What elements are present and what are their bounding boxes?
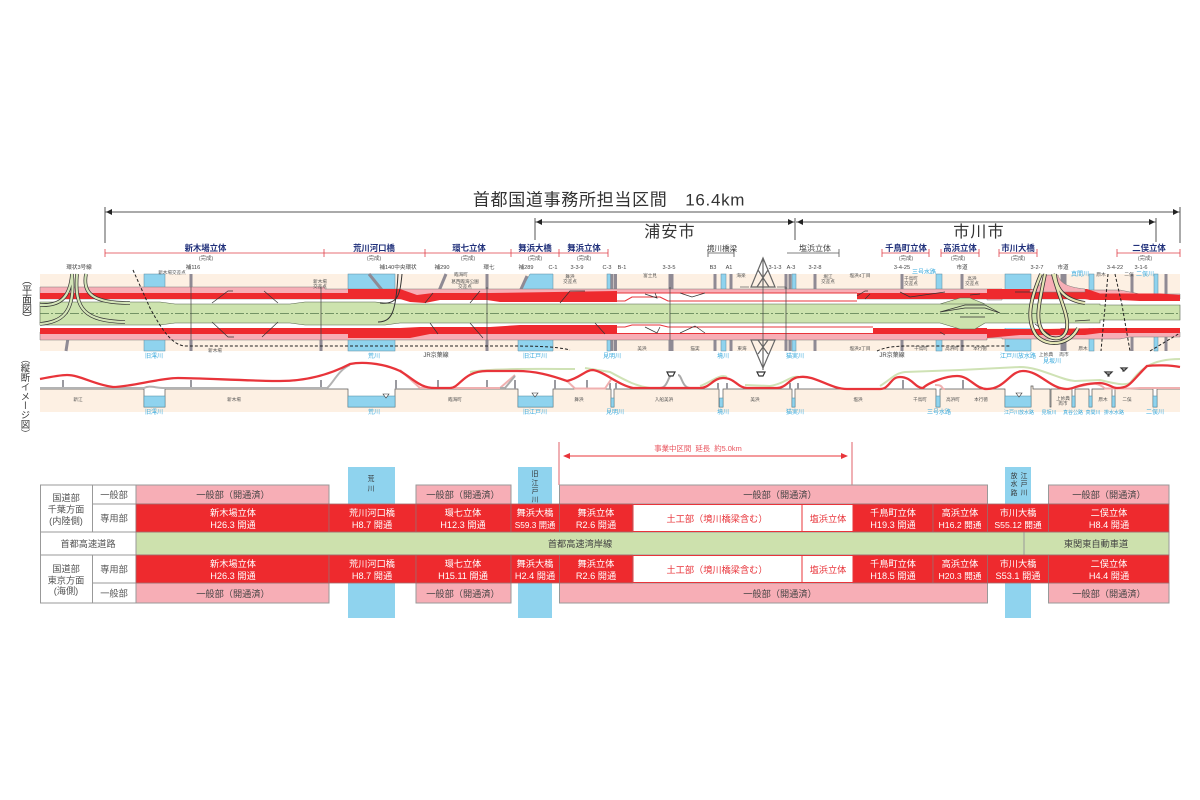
lower dedicated row labels: 市川大橋	[1000, 558, 1036, 569]
water level marks	[383, 393, 1022, 398]
lower dedicated row labels: 舞浜立体	[578, 558, 614, 569]
plan small place labels: 葛西臨海公園	[451, 278, 479, 285]
road names: 環七	[483, 263, 495, 271]
upper dedicated row labels: S59.3 開通	[515, 520, 556, 530]
road names: B-1	[618, 265, 626, 271]
completion notes: (完成)	[199, 254, 213, 262]
plan river and line labels: JR京葉線	[423, 351, 449, 359]
river columns	[348, 467, 1031, 618]
plan small place labels: 新木場	[208, 347, 222, 354]
plan small place labels: 交差点	[458, 283, 472, 290]
JR Keiyo line dashed	[133, 270, 1180, 351]
upper dedicated row labels: 環七立体	[445, 507, 481, 518]
green row labels: 東関東自動車道	[1064, 538, 1128, 549]
road names: 補140中央環状	[379, 263, 417, 271]
plan small place labels: 高浜	[967, 275, 977, 282]
upper dedicated row labels: H8.4 開通	[1089, 520, 1129, 530]
lower dedicated row labels: H8.7 開通	[352, 571, 392, 581]
section names: 環七立体	[452, 243, 486, 253]
road names: 三号水路	[912, 268, 936, 276]
green expressway line	[470, 359, 1180, 388]
plan river and line labels: 猫実川	[786, 352, 804, 360]
plan background	[40, 274, 1180, 351]
lower dedicated row labels: 千鳥町立体	[870, 558, 916, 569]
interchange at Arakawa	[378, 274, 402, 322]
lower dedicated row labels: 荒川河口橋	[349, 558, 395, 569]
road names: C-1	[548, 265, 558, 271]
status table	[40, 467, 1169, 618]
completion notes: (完成)	[899, 254, 913, 262]
road names: 3-3-5	[662, 265, 676, 271]
profile river labels: 旧澪川	[145, 408, 163, 416]
river labels	[368, 470, 1028, 504]
lower dedicated row labels: 土工部（境川橋梁含む）	[666, 564, 768, 575]
pink row labels: 一般部（開通済）	[426, 588, 500, 599]
red lines of unfinished section	[617, 293, 873, 334]
plan river and line labels: 両市	[1059, 351, 1069, 358]
profile place labels: 原木	[1098, 396, 1108, 403]
green expressway row	[136, 532, 1169, 555]
ground	[40, 386, 1180, 412]
profile place labels: 美浜	[750, 396, 760, 403]
black span lines	[708, 249, 839, 257]
profile place labels: 新木場	[227, 396, 241, 403]
row heading text: 国道部	[52, 492, 80, 503]
profile river labels: 真谷公路	[1063, 409, 1083, 416]
plan small place labels: 新木場交差点	[158, 269, 186, 276]
completion notes: (完成)	[367, 254, 381, 262]
profile place labels: 高浜町	[946, 396, 960, 403]
row heading text: 東京方面	[48, 574, 84, 586]
profile river labels: 旧江戸川	[523, 409, 547, 416]
plan small place labels: 千鳥町	[904, 275, 918, 282]
plan small place labels: 交差点	[313, 283, 327, 290]
upper dedicated row labels: 塩浜立体	[810, 513, 846, 524]
general road grey and pink profile	[40, 365, 1180, 389]
section names	[185, 243, 1166, 253]
span arrow: project section 5.0km	[559, 442, 852, 485]
lower dedicated row	[136, 555, 1169, 583]
thin bridge lines through the lanes	[191, 287, 786, 340]
profile river labels: 見明川	[606, 409, 624, 416]
plan small place labels: 猫実	[690, 345, 700, 352]
section span lines	[105, 249, 1180, 257]
road names: 3-1-6	[1134, 265, 1148, 271]
completion notes: (完成)	[1011, 254, 1025, 262]
label: section length: 事業中区間 延長 約5.0km	[654, 444, 742, 453]
pink row labels	[196, 489, 1146, 599]
lower dedicated row labels: H2.4 開通	[515, 571, 555, 581]
river water in profile	[144, 396, 1157, 407]
rivers in plan	[144, 274, 1158, 351]
profile place labels: 千鳥町	[913, 396, 927, 403]
diamond interchange lower	[751, 340, 775, 370]
upper dedicated row labels: 土工部（境川橋梁含む）	[666, 513, 768, 524]
plan small place labels: 富士見	[643, 272, 657, 279]
lower dedicated row labels: H18.5 開通	[870, 571, 916, 581]
lower dedicated row labels: S53.1 開通	[996, 571, 1040, 581]
road names: 3-2-7	[1030, 265, 1044, 271]
plan small place labels: 東海	[737, 345, 747, 352]
upper dedicated row labels: H16.2 開通	[939, 520, 982, 530]
completion notes: (完成)	[1138, 254, 1152, 262]
piers	[63, 380, 963, 389]
white unfinished section lower	[617, 326, 873, 333]
plan small place labels: 交差点	[904, 280, 918, 287]
profile river labels	[145, 408, 1164, 416]
row heading text: 国道部	[52, 563, 80, 574]
road names: 環状3号線	[66, 263, 92, 271]
lower general lanes pink band	[40, 332, 1180, 340]
profile river labels: 江戸川放水路	[1004, 409, 1034, 416]
lower dedicated row labels: 舞浜大橋	[517, 558, 553, 569]
header: jurisdiction span and city spans	[105, 190, 1180, 243]
pink row labels: 一般部（開通済）	[196, 489, 270, 500]
row heading text: (内陸側)	[49, 515, 83, 526]
upper exclusive lanes red	[40, 289, 1180, 303]
ramp details	[212, 291, 1090, 338]
profile place labels: 塩浜	[853, 396, 863, 403]
upper dedicated row labels: H26.3 開通	[210, 520, 256, 530]
upper dedicated row	[136, 504, 1169, 532]
upper white unopened cells	[633, 504, 853, 532]
Ichikawa loop interchange	[1030, 274, 1085, 343]
lower white unopened cells	[633, 556, 853, 582]
river labels: 旧	[532, 470, 539, 478]
road names: 補289	[519, 263, 533, 271]
plan small place labels: 新木場	[313, 278, 327, 285]
pink row labels: 一般部（開通済）	[1072, 588, 1146, 599]
river labels: 放	[1011, 471, 1018, 480]
plan river and line labels: 二俣	[1124, 271, 1134, 278]
upper dedicated row labels: H8.7 開通	[352, 520, 392, 530]
fan of ramps near Ichikawa loop	[1030, 275, 1085, 292]
profile river labels: 見坂川	[1041, 409, 1057, 416]
lower dedicated row labels: H26.3 開通	[210, 571, 256, 581]
plan small place labels: 千鳥町	[914, 345, 928, 352]
label: Urayasu city: 浦安市	[644, 223, 696, 241]
profile place labels: 臨海町	[448, 396, 462, 403]
profile place labels	[73, 395, 1132, 407]
river labels: 川	[532, 497, 539, 504]
plan small place labels: 高浜町	[945, 345, 959, 352]
section names: 舞浜大橋	[518, 243, 552, 253]
lower dedicated row labels: 高浜立体	[942, 558, 978, 569]
lower dedicated row labels: 二俣立体	[1091, 558, 1127, 569]
plan small place labels: 交差点	[563, 278, 577, 285]
row heading text: 首都高速道路	[60, 538, 116, 549]
road names: 3-1-3	[768, 265, 782, 271]
row heading cells	[40, 485, 136, 603]
road names: 3-2-8	[808, 265, 822, 271]
white unfinished section upper	[617, 294, 857, 301]
profile place labels: 本行徳	[974, 396, 988, 403]
plan river and line labels: 境川	[717, 352, 729, 360]
profile river labels: 猫実川	[786, 408, 804, 416]
completion notes: (完成)	[528, 254, 542, 262]
pink row labels: 一般部（開通済）	[426, 489, 500, 500]
profile river labels: 荒川	[368, 408, 380, 416]
pink row labels: 一般部（開通済）	[743, 588, 817, 599]
road names: 市道	[956, 263, 968, 271]
road names: 3-3-9	[570, 265, 584, 271]
profile river labels: 二俣川	[1146, 408, 1164, 416]
row heading text	[48, 489, 128, 598]
plan river and line labels: 見坂川	[1043, 357, 1061, 365]
upper dedicated row labels: 千鳥町立体	[870, 507, 916, 518]
river labels: 江	[1021, 472, 1028, 480]
section labels above the plan	[66, 243, 1180, 276]
section names: 千鳥町立体	[885, 243, 928, 253]
plan river and line labels: 原木	[1096, 271, 1106, 278]
lower dedicated row labels: 新木場立体	[210, 558, 256, 569]
green row labels: 首都高速湾岸線	[548, 538, 612, 549]
upper dedicated row labels: 市川大橋	[1000, 507, 1036, 518]
label: longitudinal image: （縦断イメージ図）	[20, 354, 30, 439]
plan small place labels: 美浜	[637, 345, 647, 352]
plan river and line labels: 旧江戸川	[523, 353, 547, 360]
river labels: 川	[1021, 490, 1028, 497]
upper dedicated row labels: H19.3 開通	[870, 520, 916, 530]
lower dedicated row labels: 塩浜立体	[810, 564, 846, 575]
plan small place labels: 交差点	[965, 280, 979, 287]
completion notes: (完成)	[577, 254, 591, 262]
completion notes: (完成)	[461, 254, 475, 262]
road names: A-3	[787, 265, 795, 271]
arrow: Ichikawa city span	[796, 218, 1156, 242]
upper dedicated row labels: 二俣立体	[1091, 507, 1127, 518]
river labels: 江	[532, 479, 539, 487]
lower dedicated row labels: R2.6 開通	[576, 571, 616, 581]
row heading text: 専用部	[100, 564, 128, 574]
plan river and line labels: 二俣川	[1136, 270, 1154, 278]
diamond interchange upper	[740, 258, 786, 288]
profile place labels: 舞浜	[574, 396, 584, 403]
pink row labels: 一般部（開通済）	[196, 588, 270, 599]
upper dedicated row labels: 新木場立体	[210, 507, 256, 518]
river labels: 戸	[532, 487, 539, 495]
plan small place labels: 海楽	[736, 272, 746, 279]
red exclusive lanes profile	[40, 363, 1180, 389]
plan view diagram	[40, 258, 1180, 370]
section names: 境川橋梁	[707, 243, 738, 253]
profile place labels: 二俣	[1122, 396, 1132, 403]
plan small place labels	[158, 269, 1088, 354]
row heading text: 専用部	[100, 512, 128, 524]
lower dedicated row labels: H20.3 開通	[939, 571, 982, 581]
road names	[66, 263, 1148, 276]
section names: 荒川河口橋	[353, 243, 396, 253]
upper dedicated row labels: R2.6 開通	[576, 520, 616, 530]
road names: 補116	[186, 263, 200, 271]
pink general rows	[136, 485, 1169, 603]
section names: 二俣立体	[1132, 243, 1166, 253]
label: plan view: （平面図）	[20, 275, 32, 323]
row heading text: 千葉方面	[48, 504, 84, 514]
row heading text: 一般部	[100, 588, 128, 598]
plan small place labels: 塩浜4丁目	[850, 272, 870, 279]
center line	[40, 312, 1180, 314]
label: Ichikawa city: 市川市	[953, 223, 1005, 241]
road names: 補290	[435, 263, 449, 271]
profile place labels: 上妙典	[1056, 395, 1070, 402]
plan river and line labels: JR京葉線	[879, 351, 905, 359]
upper dedicated row labels	[210, 507, 1129, 530]
completion notes: (完成)	[951, 254, 965, 262]
plan river and line labels: 上妙典	[1039, 351, 1053, 358]
upper dedicated row labels: 荒川河口橋	[349, 507, 395, 518]
plan river and line labels: 荒川	[368, 352, 380, 360]
river labels: 水	[1011, 479, 1018, 488]
pink row labels: 一般部（開通済）	[743, 489, 817, 500]
expressway green band	[40, 298, 1180, 329]
lower exclusive lanes red	[40, 325, 1180, 338]
plan small place labels: 堀江	[823, 273, 833, 280]
plan river and line labels: 江戸川放水路	[1000, 352, 1036, 360]
plan small place labels: 交差点	[821, 278, 835, 285]
upper dedicated row labels: S55.12 開通	[994, 520, 1042, 530]
road names: 市道	[1057, 263, 1069, 271]
lower dedicated row labels: H15.11 開通	[438, 571, 488, 581]
profile river labels: 境川	[717, 408, 729, 416]
road names: C-3	[602, 265, 612, 271]
plan small place labels: 舞浜	[565, 273, 575, 280]
profile river labels: 真間川	[1085, 409, 1101, 416]
section names: 市川大橋	[1001, 243, 1035, 253]
profile place labels: 入船美浜	[655, 396, 674, 403]
river labels: 戸	[1021, 480, 1028, 488]
river labels: 荒	[368, 474, 375, 483]
section names: 舞浜立体	[567, 243, 601, 253]
plan river and line labels: 真間川	[1071, 270, 1089, 278]
row heading text: (海側)	[54, 585, 78, 596]
road names: 3-4-22	[1107, 265, 1123, 271]
road names: 3-4-25	[894, 265, 910, 271]
upper dedicated row labels: 高浜立体	[942, 507, 978, 518]
plan small place labels: 原木	[1078, 345, 1088, 352]
title: 首都国道事務所担当区間 16.4km	[473, 190, 745, 210]
road names: B3	[710, 265, 716, 271]
profile river labels: 三号水路	[927, 408, 951, 416]
profile river labels: 排水水路	[1104, 409, 1124, 416]
elevated overpass icons	[667, 368, 1127, 376]
plan small place labels: 臨海町	[454, 271, 468, 278]
upper general lanes pink band	[40, 287, 1180, 300]
profile place labels: 両市	[1058, 400, 1068, 407]
pink row labels: 一般部（開通済）	[1072, 489, 1146, 500]
row heading text: 一般部	[100, 489, 128, 500]
profile place labels: 新江	[73, 396, 83, 403]
completion notes	[199, 254, 1152, 262]
ground top line	[40, 386, 1180, 407]
plan river and line labels: 旧澪川	[145, 352, 163, 360]
section names: 高浜立体	[943, 243, 977, 253]
river labels: 川	[368, 486, 375, 493]
white median strip under the lanes	[40, 299, 1180, 328]
lower dedicated row labels: H4.4 開通	[1089, 571, 1129, 581]
arrow: jurisdiction 16.4km	[105, 207, 1180, 243]
plan small place labels: 塩浜2丁目	[850, 345, 870, 352]
lower dedicated row labels: 環七立体	[445, 558, 481, 569]
section names: 塩浜立体	[799, 243, 831, 253]
green row labels	[548, 538, 1128, 549]
upper dedicated row labels: 舞浜大橋	[517, 507, 553, 518]
road names: A1	[726, 265, 732, 271]
plan small place labels: 本行徳	[973, 345, 987, 352]
river labels: 路	[1011, 488, 1018, 497]
arrow: Urayasu city span	[535, 218, 795, 240]
plan river and line labels	[145, 270, 1154, 365]
interchange left	[40, 274, 130, 324]
upper dedicated row labels: 舞浜立体	[578, 507, 614, 518]
lower dedicated row labels	[210, 558, 1129, 581]
plan river and line labels: 見明川	[603, 353, 621, 360]
upper dedicated row labels: H12.3 開通	[440, 520, 486, 530]
cross roads	[66, 274, 1166, 351]
section names: 新木場立体	[185, 243, 227, 253]
longitudinal profile diagram	[40, 359, 1180, 416]
